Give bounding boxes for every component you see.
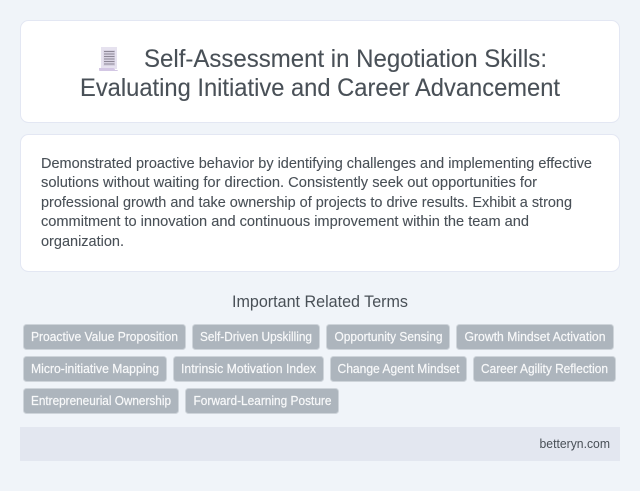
footer source: betteryn.com (540, 437, 610, 451)
tag: Proactive Value Proposition (31, 330, 178, 344)
tag: Opportunity Sensing (334, 330, 442, 344)
footer bar (20, 427, 620, 461)
panel: header (20, 20, 620, 122)
tag (24, 324, 186, 350)
tag: Career Agility Reflection (481, 362, 608, 376)
tag (474, 356, 616, 382)
text block: description: Demonstrated proactive behavior by identifying challenges and implementing effective (41, 156, 592, 172)
tag list (24, 324, 616, 414)
text block: description: professional growth and take ownership of projects to drive results. Exhibit a strong (41, 195, 572, 211)
tag (192, 324, 320, 350)
tag: Self-Driven Upskilling (200, 330, 312, 344)
tag (24, 356, 166, 382)
tag (24, 388, 178, 414)
tag (186, 388, 338, 414)
text block: description (41, 156, 592, 250)
tag: Entrepreneurial Ownership (31, 394, 171, 408)
tag: Intrinsic Motivation Index (181, 362, 317, 376)
text block: description: organization. (41, 234, 124, 250)
tag: Change Agent Mindset (338, 362, 460, 376)
text block: description: commitment to innovation and continuous improvement within the team and (41, 214, 529, 230)
tag: Growth Mindset Activation (464, 330, 606, 344)
text block: description: solutions without waiting for direction. Consistently seek out opportunities for (41, 175, 537, 191)
tag: Forward-Learning Posture (194, 394, 332, 408)
heading: related terms: Important Related Terms (232, 293, 408, 311)
panel: description (20, 134, 620, 272)
tag (326, 324, 450, 350)
icon: scroll document (99, 47, 118, 71)
title: Evaluating Initiative and Career Advancement (80, 75, 560, 102)
tag (456, 324, 614, 350)
title (80, 46, 560, 102)
tag (330, 356, 466, 382)
tag (174, 356, 324, 382)
title: Self-Assessment in Negotiation Skills: (144, 46, 547, 73)
tag: Micro-initiative Mapping (31, 362, 159, 376)
